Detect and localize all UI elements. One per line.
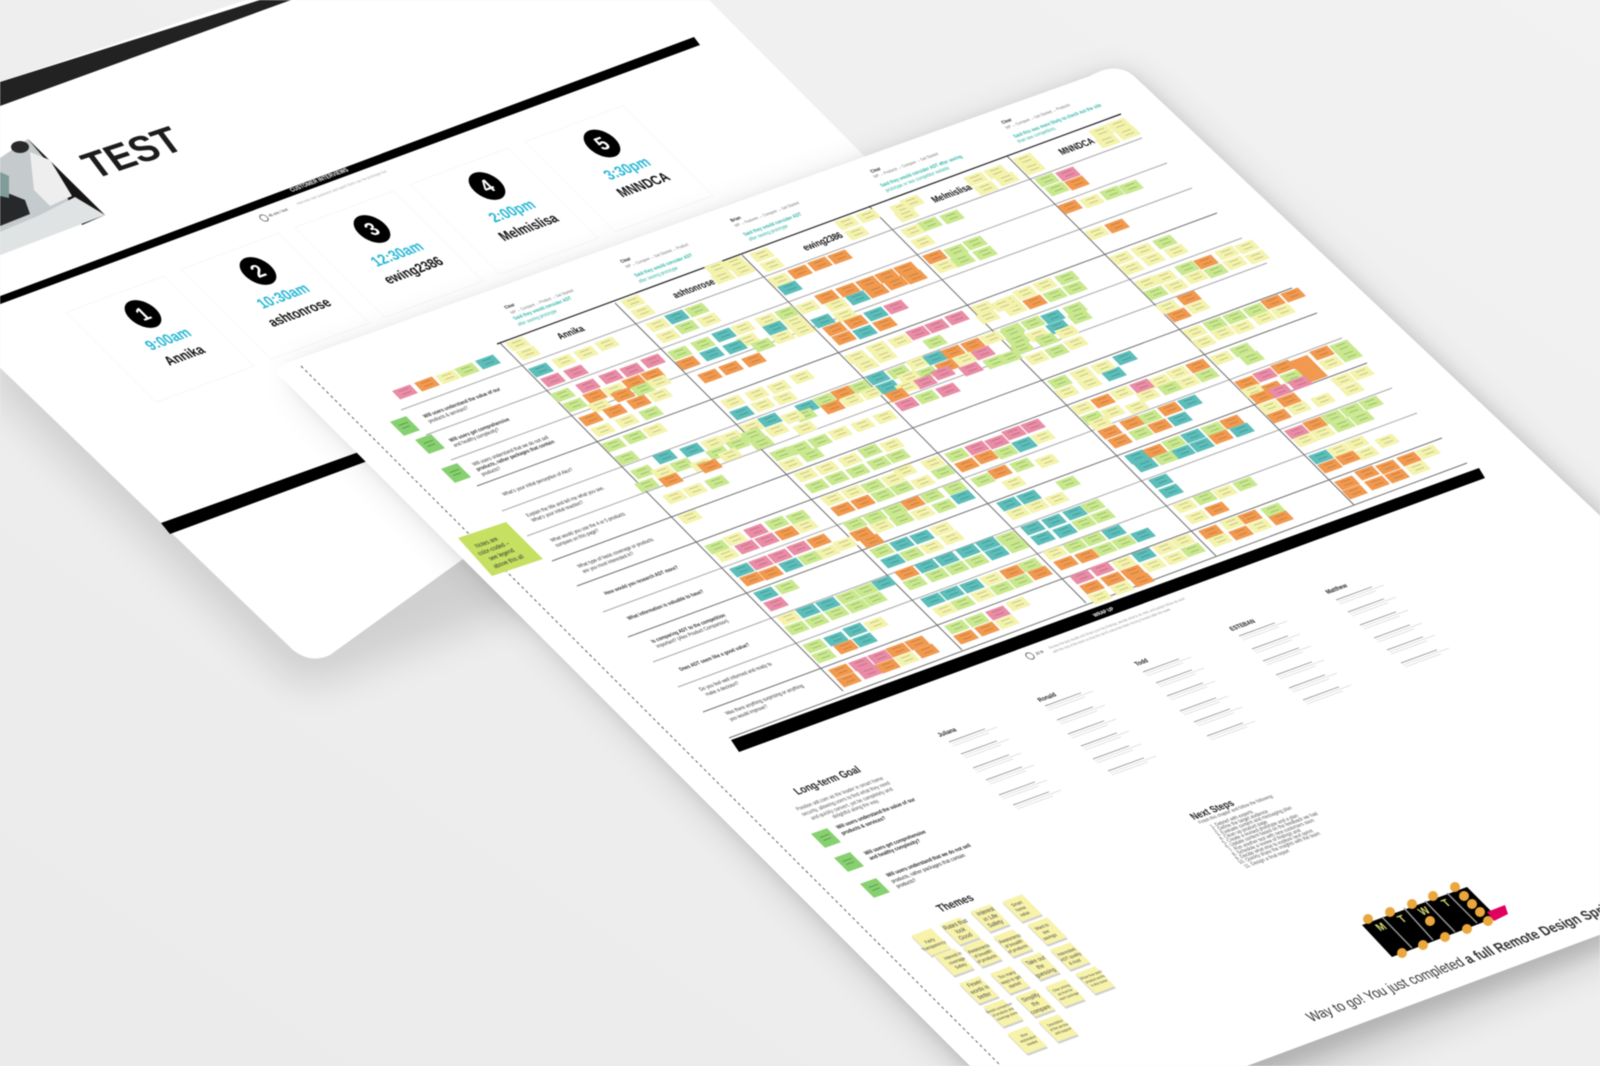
column header: ashtonrose: MP → Compare → Get Started → Product xyxy=(624,242,690,269)
themes sticky notes: coverage plans xyxy=(995,1011,1019,1022)
column header: MNNDCA: Said this was more likely to check out the site xyxy=(1012,103,1104,140)
column header: Annika: Clear xyxy=(503,302,517,311)
row questions: What would you use the 4 or 5 products xyxy=(549,512,628,544)
themes sticky notes: compare xyxy=(1029,1004,1053,1016)
themes sticky notes: in Life xyxy=(981,912,1001,923)
stickies: Annika column xyxy=(505,336,940,688)
themes sticky notes: Rates that xyxy=(942,918,970,932)
themes sticky notes: Smart xyxy=(1010,900,1025,908)
interview card 2 xyxy=(181,233,369,359)
row questions: products? xyxy=(480,466,503,478)
next steps: 11. Design a final report xyxy=(1243,848,1292,870)
interview card 4 xyxy=(410,148,598,274)
themes sticky notes: Fairly xyxy=(923,937,938,945)
sprint logo: T xyxy=(1439,898,1454,909)
next steps: 5. Create a revised prototype and a plan xyxy=(1221,813,1300,846)
column header: MNNDCA xyxy=(1000,102,1104,157)
row questions: and healthy complexity? xyxy=(452,427,502,449)
column header: Melmislisa: MP → Products → Compare → Get Started xyxy=(872,151,940,179)
interview card 3: ewing2386 xyxy=(380,254,447,287)
long-term goal: security, allowing users to find what they need xyxy=(800,781,892,818)
interview card 1: 9:00am xyxy=(141,325,196,354)
themes sticky notes: Description xyxy=(1046,1019,1064,1028)
interview card 4: 2:00pm xyxy=(485,197,540,226)
large note: colour legend: above this all xyxy=(491,554,526,570)
column header: ashtonrose xyxy=(619,242,718,300)
column header: ewing2386: MP → Features → Compare → Get Started xyxy=(733,200,801,228)
top black bar xyxy=(0,0,291,106)
interview card 1: Annika xyxy=(160,343,209,368)
themes sticky notes: started xyxy=(1007,981,1024,990)
next steps: 8. Schedule a review of findings and xyxy=(1231,828,1303,858)
sprint questions with stickers: Will users understand the value of our xyxy=(835,797,918,831)
themes sticky notes: Simple comparison xyxy=(985,1002,1014,1014)
themes sticky notes: Awareness xyxy=(966,943,992,955)
themes sticky notes: and support xyxy=(1054,1026,1073,1036)
row questions: compare on this page? xyxy=(554,528,601,549)
lower black bar xyxy=(161,430,430,534)
team notes: Ronald xyxy=(1036,691,1156,775)
section heading: CUSTOMER INTERVIEWS xyxy=(289,168,351,194)
next steps: 2. Define the target audience xyxy=(1212,809,1271,834)
long-term goal: delightful along the way. xyxy=(831,798,881,820)
themes sticky notes: Awareness xyxy=(997,933,1023,945)
stickies: Melmislisa column xyxy=(889,164,1294,548)
row questions: are you most interested in? xyxy=(581,551,636,575)
themes sticky notes: savings xyxy=(1041,932,1060,942)
next steps: 10. Quickly share the insights with the team xyxy=(1237,831,1323,866)
themes sticky notes: Interest in xyxy=(942,951,964,962)
themes sticky notes: More xyxy=(1019,1032,1029,1038)
themes sticky notes: Fewer xyxy=(966,979,984,989)
themes sticky notes xyxy=(911,894,1116,1056)
column header: ashtonrose: Clear xyxy=(619,256,633,265)
column header: Annika: Said they would consider ADT xyxy=(512,296,574,322)
themes sticky notes: product works xyxy=(1084,974,1106,984)
themes sticky notes: Safety xyxy=(986,918,1006,929)
interview card 3: 3 xyxy=(359,219,386,240)
column header: ashtonrose: ashtonrose xyxy=(669,277,718,300)
column header: MNNDCA: Clear xyxy=(1000,117,1014,126)
column header: ewing2386: ewing2386 xyxy=(800,231,846,252)
duration note: Interview real customers and watch them use the prototype live xyxy=(295,169,389,206)
column header: MNNDCA: MP → Compare → Get Started → Products xyxy=(1004,102,1071,130)
large note: colour legend: color-coded – xyxy=(476,540,512,557)
column header: ewing2386 xyxy=(729,200,846,252)
themes sticky notes: Too many xyxy=(997,970,1018,981)
row questions: What's your initial perception of Alex? xyxy=(501,467,575,498)
row questions: What information is valuable to have? xyxy=(626,589,706,622)
row questions: you would improve? xyxy=(728,704,770,723)
row questions: How would you research ADT more? xyxy=(603,565,681,597)
row questions: Will users get comprehensive xyxy=(448,417,512,444)
section heading: wrap up: WRAP UP xyxy=(1092,606,1117,619)
themes sticky notes: Interest xyxy=(975,906,997,918)
themes sticky notes: of products xyxy=(1006,943,1030,955)
column header: Melmislisa: Clear xyxy=(869,166,883,175)
row questions: Will users understand that we do not sell xyxy=(471,435,551,468)
interview card 5: MNNDCA xyxy=(613,170,674,200)
row questions: Do you feel well informed and ready to xyxy=(698,662,774,693)
duration note xyxy=(258,169,389,222)
photo xyxy=(0,139,105,255)
interview card 4: Melmislisa xyxy=(495,211,562,244)
panel shadow: front board xyxy=(290,77,1600,1066)
row questions: products, rather packages that contain xyxy=(475,439,557,473)
sprint questions with stickers: Will users understand that we do not sell xyxy=(885,843,973,879)
themes sticky notes: the xyxy=(1035,963,1047,971)
themes sticky notes: the xyxy=(1030,1000,1042,1008)
next steps: 3. Evaluate content and messaging plan xyxy=(1215,805,1294,838)
interview card 1 xyxy=(66,276,254,402)
row questions: What's your initial reaction? xyxy=(530,500,586,524)
large note: colour legend: see legend xyxy=(487,547,517,562)
themes sticky notes: home xyxy=(1014,905,1029,913)
row questions: products & services? xyxy=(427,405,471,425)
themes sticky notes: Show how each xyxy=(1079,970,1103,981)
themes sticky notes: coverage xyxy=(947,956,968,966)
column header: ashtonrose: after seeing prototype xyxy=(637,266,680,285)
themes sticky notes: in the home xyxy=(1090,979,1109,988)
next steps: Finish this chapter and follow the following: xyxy=(1197,794,1276,826)
themes sticky notes: needed xyxy=(1026,1040,1039,1047)
column header: ewing2386: Said they would consider ADT xyxy=(742,212,804,238)
title: TEST: TEST xyxy=(73,119,192,187)
next steps: 6. Update content based on the feedback we had xyxy=(1224,811,1320,850)
column header: MNNDCA: MNNDCA xyxy=(1056,136,1097,157)
black bar under grid xyxy=(731,468,1485,752)
row questions: Does ADT seem like a good value? xyxy=(678,642,752,673)
column header: Annika: MP → Compare → Product → Get Started xyxy=(509,288,575,315)
themes sticky notes: value xyxy=(1018,910,1032,918)
column header: MNNDCA: than see competitors xyxy=(1016,126,1058,145)
themes sticky notes: of products xyxy=(975,953,999,965)
duration note: 45 min / test xyxy=(267,207,290,218)
themes sticky notes: up front for xyxy=(1056,988,1075,996)
themes sticky notes: guessing xyxy=(1034,967,1058,979)
themes sticky notes: each package xyxy=(1058,991,1080,1001)
sprint questions with stickers: Will users get comprehensive xyxy=(863,830,928,857)
next steps: Next Steps xyxy=(1188,798,1238,822)
stickies: MNNDCA column xyxy=(1012,118,1441,500)
column header: ashtonrose: Said they would consider ADT xyxy=(633,253,695,279)
team notes: Juliana: Juliana xyxy=(936,727,959,739)
next steps: 4. Clean up product page xyxy=(1218,819,1270,842)
large note: colour legend xyxy=(458,522,543,576)
themes heading: Themes xyxy=(934,893,977,915)
row questions xyxy=(422,387,806,723)
panel: synthesis board xyxy=(277,68,1600,1066)
themes sticky notes: & trust xyxy=(1067,958,1084,967)
row questions: important? (Alex Product Comparison) xyxy=(655,619,731,650)
front board surface xyxy=(277,68,1600,1066)
sprint questions with stickers: products & services? xyxy=(840,816,888,837)
themes sticky notes: of breadth xyxy=(1003,939,1025,950)
column header: Melmislisa xyxy=(869,151,975,204)
themes sticky notes: Want to xyxy=(1033,922,1051,932)
interview card 5: 5 xyxy=(589,134,616,155)
interview card 5: 3:30pm xyxy=(600,154,655,183)
column header: Melmislisa: prototype or see competitor website xyxy=(884,166,952,194)
themes sticky notes: of the service xyxy=(1049,1022,1070,1032)
panel shadow: back board xyxy=(0,330,700,684)
long-term goal xyxy=(791,764,895,821)
column header: ewing2386: Brian xyxy=(729,215,743,224)
sprint questions with stickers: products? xyxy=(895,878,918,890)
stickies: ewing2386 column xyxy=(749,208,1206,604)
row questions: Is comparing ADT to the competition xyxy=(650,613,728,645)
interview card 4: 4 xyxy=(474,176,502,197)
team notes: Todd xyxy=(1133,657,1255,740)
section bar: customer interviews xyxy=(0,37,700,306)
sprint questions with stickers: products, rather packages that contain xyxy=(890,853,968,885)
stickies: ashtonrose column xyxy=(620,256,1053,644)
themes sticky notes: of breadth xyxy=(972,949,994,960)
sticky legend xyxy=(392,354,501,400)
interview card 1: 1 xyxy=(130,304,157,325)
large note: colour legend: Notes are xyxy=(473,536,501,550)
themes sticky notes: Safety xyxy=(953,962,969,971)
themes sticky notes: of products and xyxy=(991,1007,1015,1018)
wrap up duration and description: Review the test results and share your key findings, decide what to do next, and assign follow-up work xyxy=(1048,597,1186,650)
themes sticky notes: ways to get xyxy=(999,974,1024,986)
interview card 3: 12:30am xyxy=(367,239,428,270)
long-term goal: Position adt.com as the leader in smart home xyxy=(795,776,886,812)
panel edge shadow: front board xyxy=(285,73,1600,1066)
wrap up duration and description: with the rest of the team so that the sprint outcomes keep moving forward after the week xyxy=(1052,608,1172,654)
panel: customer interviews board xyxy=(0,0,930,659)
row questions: make a decision? xyxy=(704,681,741,698)
team notes: Esteban: ESTEBAN xyxy=(1228,618,1258,633)
interview card 2: 2 xyxy=(245,261,272,282)
goal stickers xyxy=(390,416,471,483)
sprint questions with stickers: and healthy complexity? xyxy=(868,838,923,862)
themes sticky notes: Take out xyxy=(1025,955,1048,967)
sprint logo: T xyxy=(1395,914,1410,925)
row questions: Will users understand the value of our xyxy=(422,387,503,420)
row questions: Was there anything surprising or anything xyxy=(724,683,806,717)
column header: Melmislisa: Melmislisa xyxy=(929,182,975,204)
next steps: 1. Debrief with experts xyxy=(1209,809,1256,830)
dotted timeline xyxy=(301,366,1001,1066)
interview card 2: 10:30am xyxy=(253,281,314,312)
team notes: Matthew: Matthew xyxy=(1324,583,1350,596)
themes sticky notes: better xyxy=(977,992,994,1001)
column header: Annika xyxy=(503,288,588,341)
themes sticky notes: words is xyxy=(968,985,991,996)
team notes: Todd: Todd xyxy=(1133,658,1151,668)
sprint questions with stickers xyxy=(811,797,973,898)
interview card 2: ashtonrose xyxy=(264,295,335,329)
themes sticky notes: ADT quality xyxy=(1059,951,1084,963)
long-term goal: and quickly convert, yet be completely and xyxy=(809,787,895,821)
back board surface xyxy=(0,0,930,659)
themes sticky notes: look xyxy=(953,926,969,935)
column header: ewing2386: after seeing prototype xyxy=(747,224,790,243)
wrap up duration and description: 20 M xyxy=(1034,649,1045,656)
long-term goal: Long-term Goal xyxy=(791,764,864,797)
next steps xyxy=(1188,794,1323,870)
themes sticky notes: Good xyxy=(957,932,975,942)
team notes: Matthew xyxy=(1324,583,1449,667)
themes sticky notes: Transparency xyxy=(920,939,949,953)
next steps: 7. Run another test with new customers soon xyxy=(1228,818,1317,854)
themes sticky notes: Interested: xyxy=(1056,947,1079,958)
column header: Annika: after seeing prototype xyxy=(516,309,559,328)
themes sticky notes: explanation xyxy=(1019,1035,1037,1044)
column header: Melmislisa: Said they would consider ADT after seeing xyxy=(879,154,964,189)
interview card 5 xyxy=(525,106,713,232)
sprint logo: W xyxy=(1416,905,1434,918)
themes sticky notes: Clear pricing xyxy=(1051,984,1071,993)
sprint logo xyxy=(1362,882,1508,958)
team notes: Juliana xyxy=(936,727,1061,809)
team notes: Esteban xyxy=(1228,618,1351,704)
themes sticky notes: see xyxy=(1042,929,1052,936)
next steps: 9. Decide what else to explore next sprint xyxy=(1234,829,1316,862)
column header: Annika: Annika xyxy=(554,324,588,341)
interview card 3 xyxy=(295,191,483,317)
grid lines xyxy=(401,114,1467,738)
sprint logo: M xyxy=(1373,921,1390,934)
team notes: Ronald: Ronald xyxy=(1036,692,1059,704)
themes sticky notes: Simplify xyxy=(1020,993,1042,1004)
row questions: What type of basic coverage or products xyxy=(576,537,656,570)
row questions: Explain the title and tell me what you see. xyxy=(525,485,607,519)
